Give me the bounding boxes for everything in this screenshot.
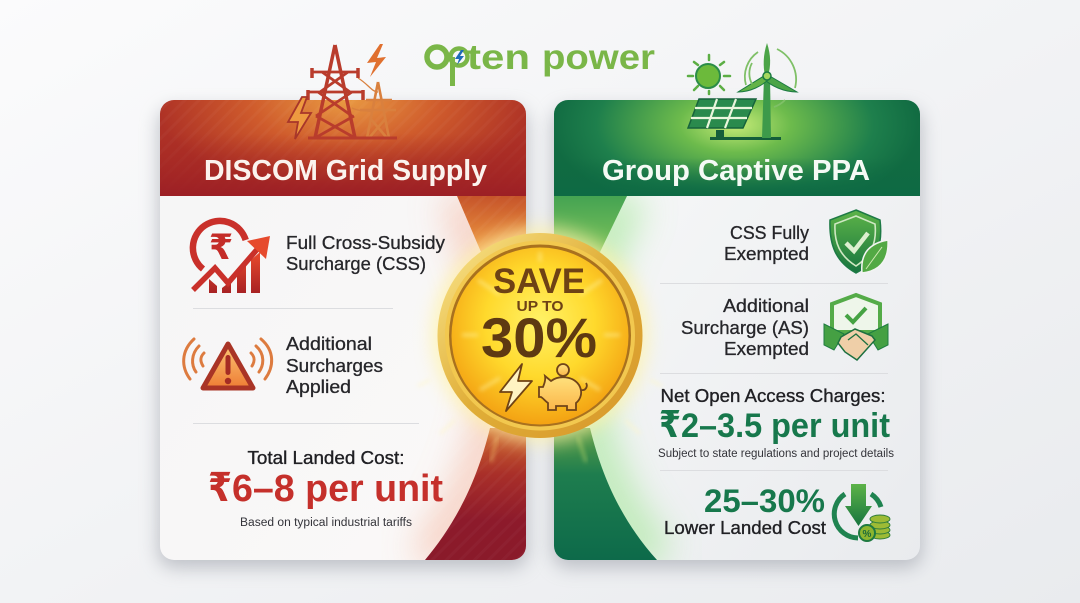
text: 30 percent: 30% bbox=[481, 306, 597, 369]
text: CSS Fully Exempted: CSS Fully bbox=[730, 222, 810, 243]
metric: rupee 2-3.5 per unit: ₹ bbox=[659, 404, 681, 445]
icon: shield with leaf bbox=[830, 210, 888, 273]
text: Net Open Access Charges: Net Open Access Charges: bbox=[660, 386, 886, 406]
text: Additional Surcharge Exempted: Surcharge (AS) bbox=[681, 317, 809, 338]
text: Full Cross-Subsidy Surcharge: Full Cross-Subsidy bbox=[286, 232, 446, 253]
text: Additional Surcharges Applied: Surcharges bbox=[286, 355, 383, 376]
text: Additional Surcharges Applied bbox=[286, 333, 383, 397]
metric: rupee 6-8 per unit: 6–8 per unit bbox=[232, 468, 443, 510]
logo: open power: ten bbox=[467, 38, 530, 77]
icon: down arrow with coins: % bbox=[863, 529, 872, 540]
icon: transmission towers and bolts bbox=[288, 44, 397, 139]
note: subject to state regulations: Subject to state regulations and project details bbox=[658, 448, 894, 460]
text: Additional Surcharge Exempted: Additional bbox=[723, 295, 809, 316]
logo: open power bbox=[427, 38, 655, 86]
note: based on typical industrial tariffs: Based on typical industrial tariffs bbox=[240, 517, 412, 529]
heading: Group Captive PPA: Group Captive PPA bbox=[602, 155, 870, 187]
badge: save up to 30 percent bbox=[418, 227, 662, 443]
text: Full Cross-Subsidy Surcharge: Surcharge (CSS) bbox=[286, 253, 426, 274]
text: Additional Surcharges Applied: Additional bbox=[286, 333, 372, 354]
text: Full Cross-Subsidy Surcharge bbox=[286, 232, 446, 274]
heading: DISCOM Grid Supply: DISCOM Grid Supply bbox=[204, 155, 487, 187]
metric: rupee 2-3.5 per unit: 2–3.5 per unit bbox=[681, 407, 890, 445]
divider bbox=[660, 283, 888, 284]
panel: Group Captive PPA bbox=[552, 100, 922, 568]
text: Additional Surcharges Applied: Applied bbox=[286, 376, 351, 397]
icon: piggy bank bbox=[539, 364, 587, 410]
text: CSS Fully Exempted: Exempted bbox=[724, 243, 809, 264]
icon: rupee with rising arrow bbox=[193, 221, 270, 293]
divider bbox=[660, 470, 888, 471]
panel: DISCOM Grid Supply bbox=[158, 100, 528, 568]
metric: 25-30 percent: 25–30% bbox=[704, 483, 825, 519]
divider bbox=[193, 308, 393, 309]
icon: down arrow with coins bbox=[834, 484, 890, 541]
logo: open power: power bbox=[542, 38, 655, 77]
icon: rupee with rising arrow: ₹ bbox=[209, 228, 233, 267]
divider bbox=[193, 423, 419, 424]
icon: shield with handshake bbox=[824, 295, 888, 360]
text: Lower Landed Cost: Lower Landed Cost bbox=[664, 518, 826, 538]
text: UP TO: UP TO bbox=[516, 298, 564, 315]
text: SAVE: SAVE bbox=[493, 262, 585, 301]
icon: warning triangle bbox=[184, 339, 272, 388]
icon: lightning bolt bbox=[500, 364, 532, 411]
divider bbox=[660, 373, 888, 374]
text: CSS Fully Exempted bbox=[724, 222, 810, 264]
text: Total Landed Cost: Total Landed Cost: bbox=[248, 448, 404, 468]
metric: rupee 6-8 per unit: ₹ bbox=[208, 466, 232, 510]
icon: sun, solar panel, wind turbine bbox=[688, 43, 797, 140]
text: Additional Surcharge Exempted bbox=[681, 295, 809, 359]
text: Additional Surcharge Exempted: Exempted bbox=[724, 338, 809, 359]
